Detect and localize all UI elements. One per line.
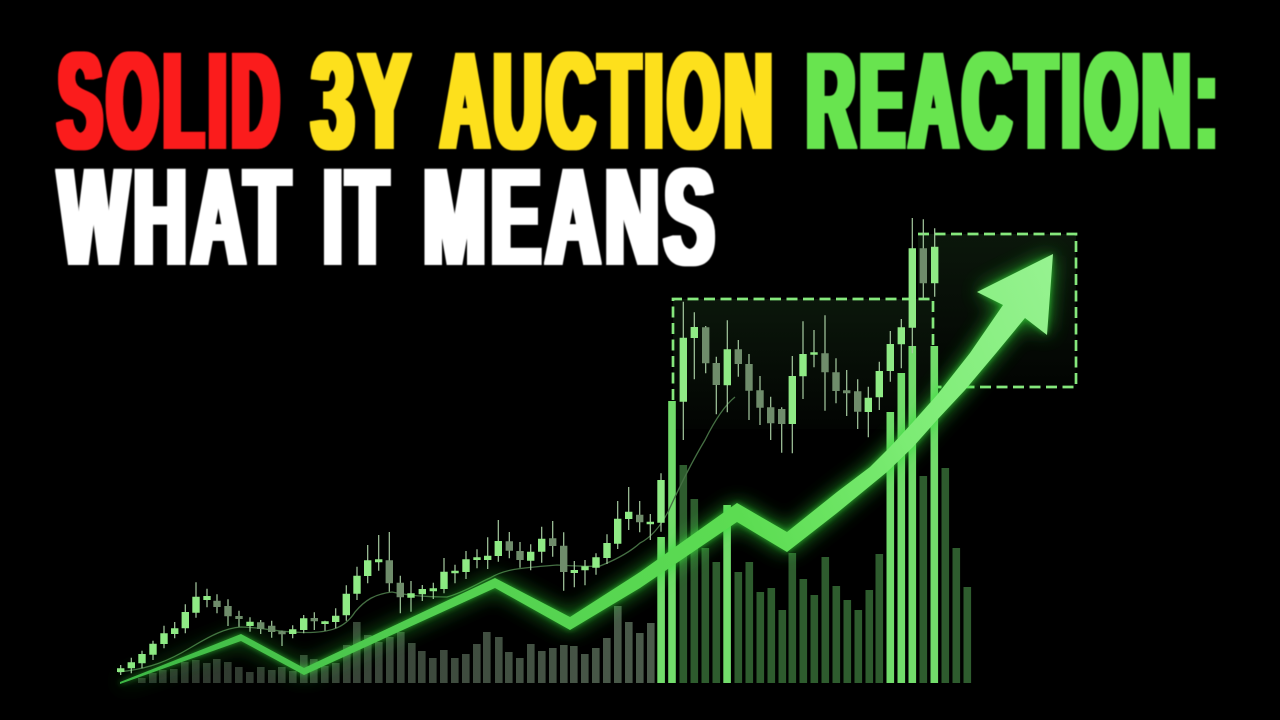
chart: stock chart with breakout arrow xyxy=(117,218,1076,684)
volume bars: bright green spikes xyxy=(657,346,938,683)
title xyxy=(58,25,1222,294)
dashed box: consolidation range xyxy=(673,299,933,429)
dashed box: breakout target xyxy=(918,234,1076,387)
arrow: rising green trend line xyxy=(120,254,1053,684)
moving average line xyxy=(118,397,735,672)
volume bars: grey, early section xyxy=(138,606,655,683)
title word: WHAT: WHAT xyxy=(59,141,295,294)
title word: 3Y: 3Y xyxy=(312,25,415,178)
candlestick bodies: grey xyxy=(213,248,927,634)
title: SOLID xyxy=(58,25,284,178)
title word: MEANS: MEANS xyxy=(424,141,720,294)
arrow glow: tight xyxy=(120,254,1053,684)
arrow glow: wide xyxy=(120,254,1053,684)
candlestick wicks xyxy=(121,218,935,675)
candlestick bodies: bright green xyxy=(117,247,938,672)
title: IT xyxy=(324,141,392,294)
volume bars: dark green, late section xyxy=(680,465,971,683)
title: AUCTION xyxy=(441,25,777,178)
